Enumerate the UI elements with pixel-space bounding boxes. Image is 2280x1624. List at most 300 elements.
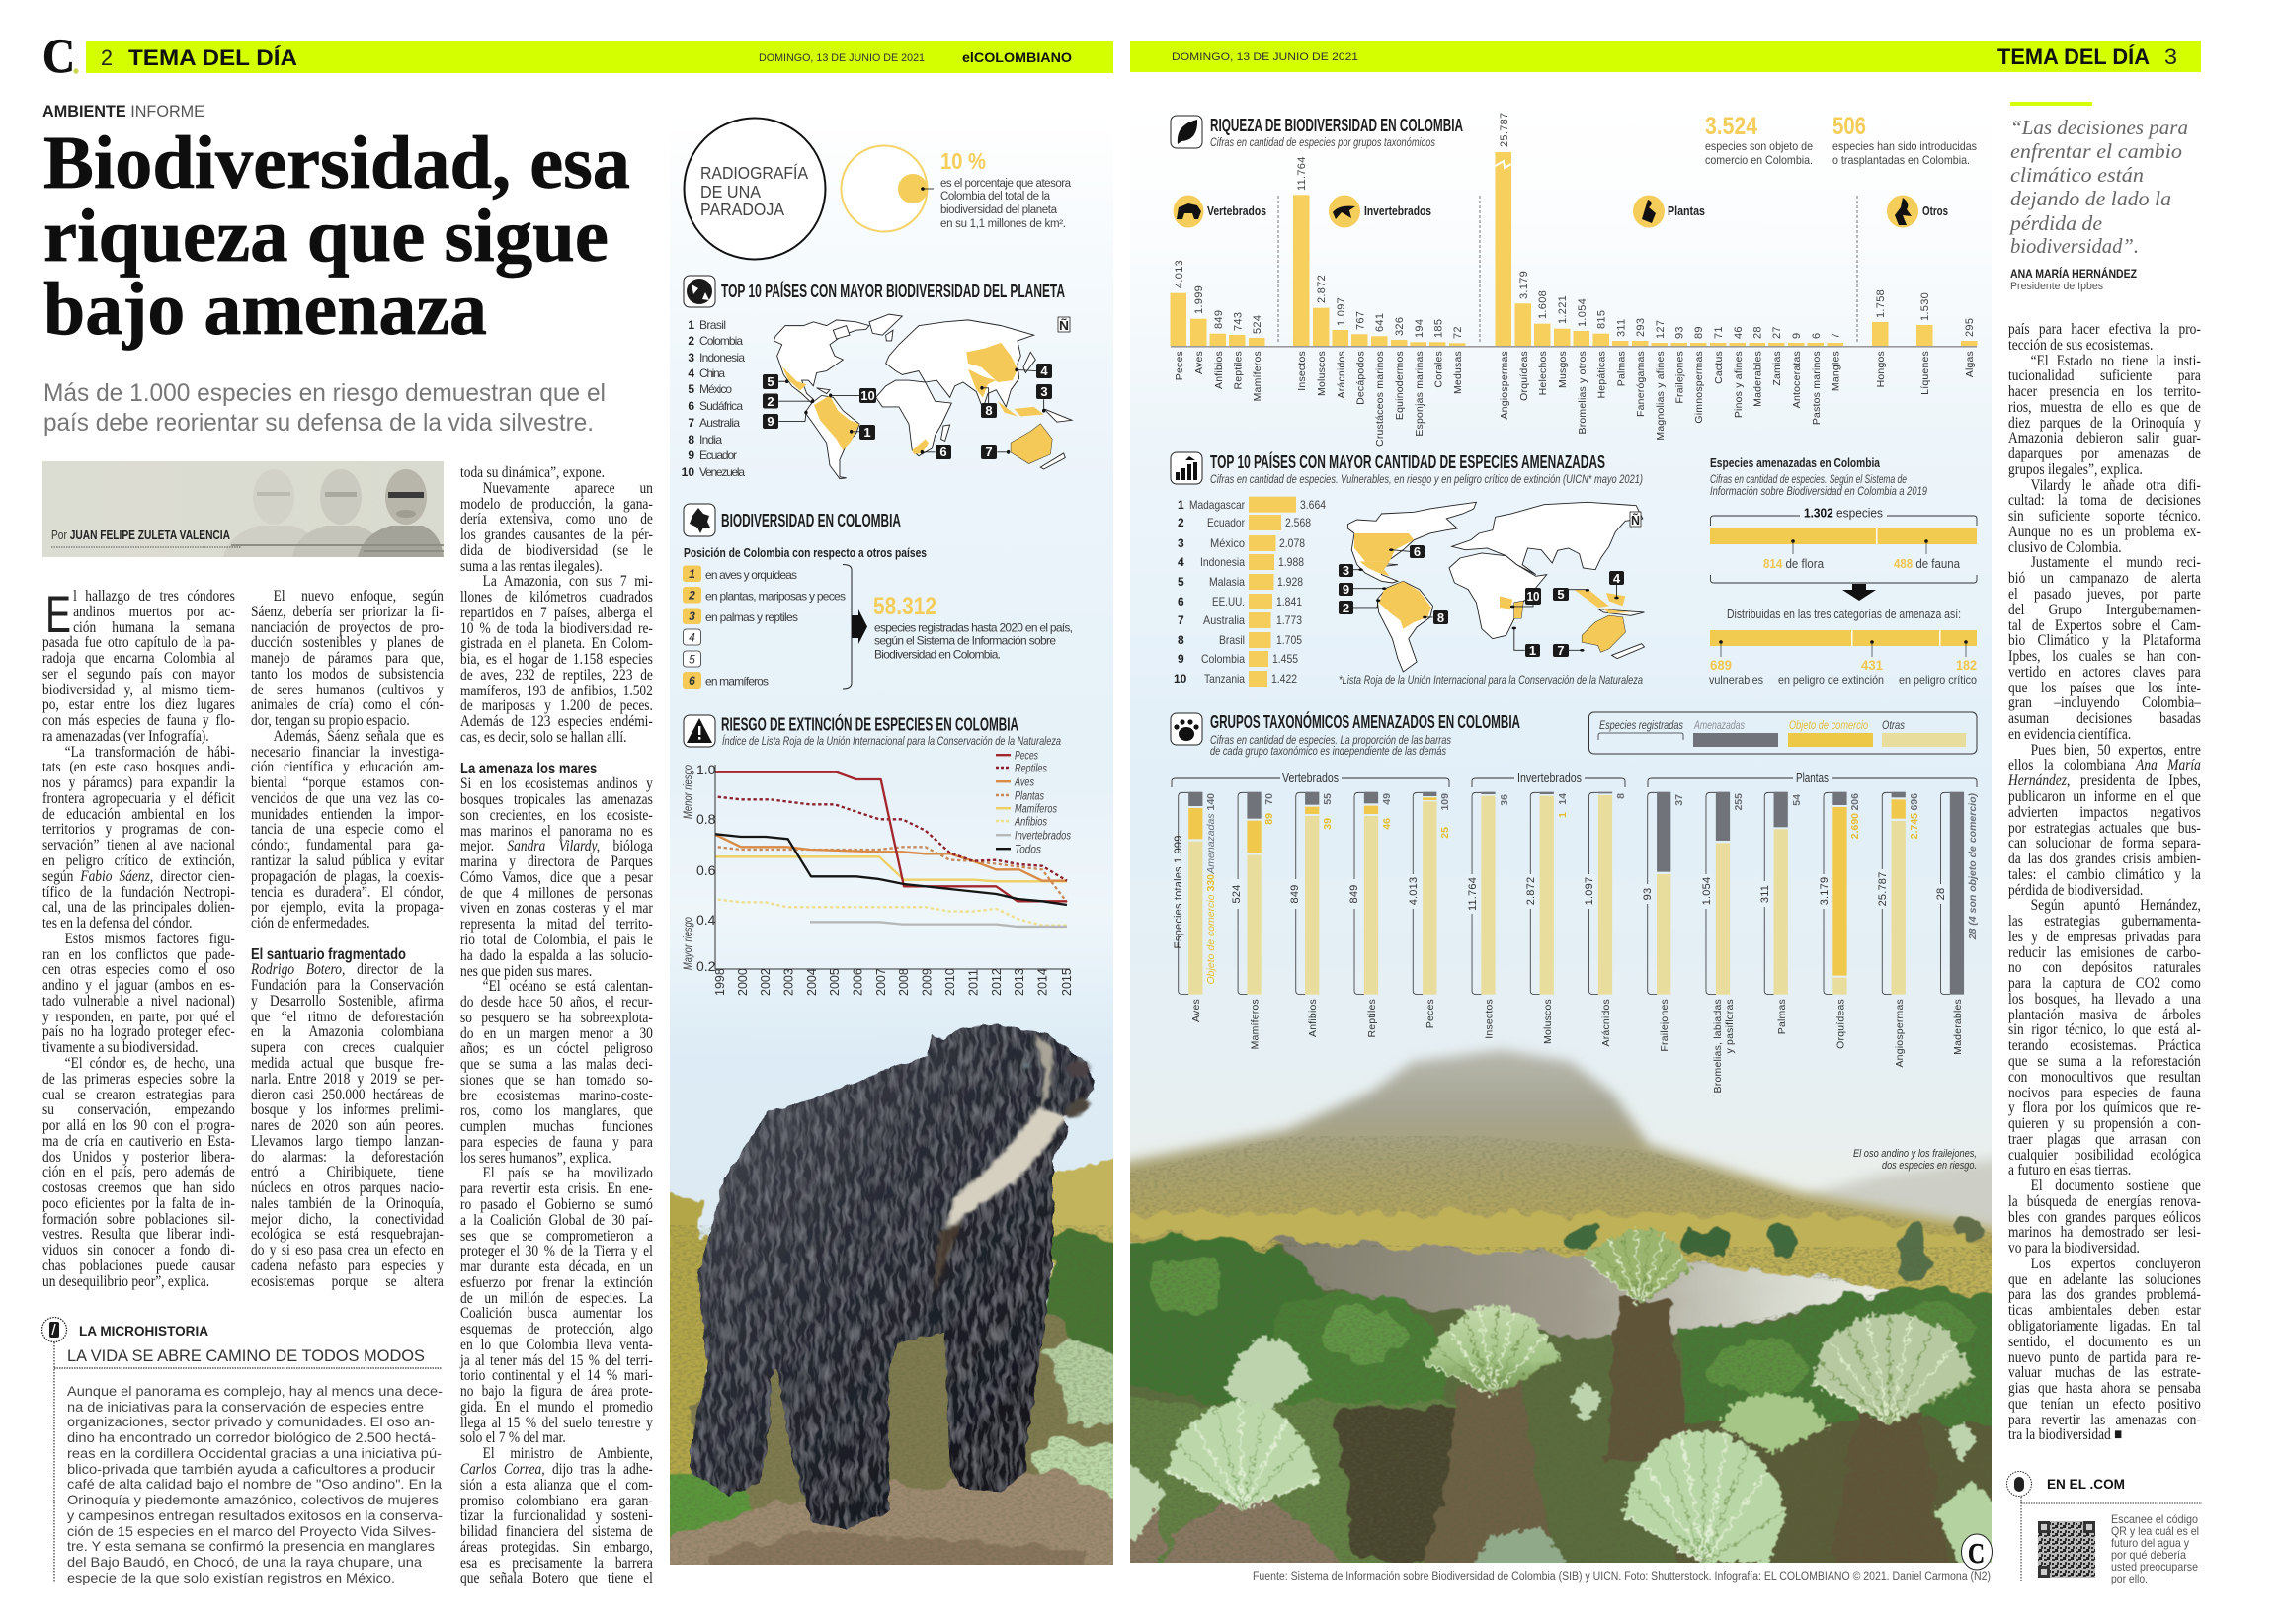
article column 4: plantación masiva de árboles xyxy=(2008,1007,2201,1023)
article column 2 xyxy=(251,588,444,1290)
threatened and commerce values: 206 xyxy=(1849,793,1861,811)
small crowns xyxy=(1225,1336,1312,1411)
circle title xyxy=(684,119,826,259)
scan text xyxy=(2111,1512,2199,1585)
bar values: 1.221 xyxy=(1557,295,1569,324)
totals: 25.787 xyxy=(1877,872,1889,906)
article column 4: vertido en actores claves para xyxy=(2008,664,2201,681)
article column 3: los seres humanos”, explica. xyxy=(460,1150,611,1167)
article column 4: da las dos grandes crisis ambien- xyxy=(2008,851,2201,867)
ranking list: 4 xyxy=(688,366,694,380)
heading: TOP 10 PAÍSES CON MAYOR BIODIVERSIDAD DEL PLANETA xyxy=(721,281,1065,301)
heading: BIODIVERSIDAD EN COLOMBIA xyxy=(721,511,901,530)
year labels: 2003 xyxy=(782,968,796,996)
subtitle: Índice de Lista Roja de la Unión Internacional para la Conservación de la Naturaleza xyxy=(722,735,1061,748)
article column 1: tado vulnerable a nivel nacional) xyxy=(42,993,235,1010)
threatened and commerce values xyxy=(1205,792,1979,984)
stat: introducidas: o trasplantadas en Colombia. xyxy=(1832,153,1970,167)
map number tags: 4 xyxy=(1613,571,1621,586)
threatened and commerce values: 89 xyxy=(1263,813,1275,825)
main headline: riqueza que sigue xyxy=(43,195,609,278)
ranking list: Indonesia xyxy=(699,351,745,365)
article column 4: Según apuntó Hernández, xyxy=(2031,897,2201,914)
categories bar: vulnerables xyxy=(1709,673,1763,687)
bar names: Mamíferos xyxy=(1252,351,1263,401)
y axis labels: 0.4 xyxy=(696,912,716,928)
bracket xyxy=(843,565,852,689)
article column 4: Aunque no es un problema ex- xyxy=(2008,524,2201,540)
page header: left xyxy=(42,28,1113,83)
pull quote: climático están xyxy=(2010,163,2144,187)
species text: especies registradas hasta 2020 en el país, xyxy=(874,620,1073,634)
threatened and commerce values: 255 xyxy=(1733,793,1745,811)
threatened and commerce values: 2.690 xyxy=(1849,813,1861,839)
bar values: 1.530 xyxy=(1919,292,1931,321)
photo: paramo landscape xyxy=(1130,1043,1992,1563)
article column 1 xyxy=(42,588,235,1290)
bar names: Decápodos xyxy=(1355,351,1367,405)
bar values: 1.097 xyxy=(1336,297,1347,326)
heading: TOP 10 PAÍSES CON MAYOR CANTIDAD DE ESPECIES AMENAZADAS xyxy=(1210,451,1605,472)
article column 2: en la Amazonia colombiana xyxy=(251,1023,444,1040)
article column 1: Estos mismos factores figu- xyxy=(65,931,235,947)
ranking list: Brasil xyxy=(699,318,726,332)
group names: Aves xyxy=(1190,999,1202,1022)
article column 1: cal, una de las principales dolien- xyxy=(42,899,235,916)
ranking list: 10 xyxy=(682,465,694,479)
bar names: Algas xyxy=(1964,351,1976,377)
article column 3: La amenaza los mares xyxy=(460,761,597,777)
article column 2: tanto los modos de subsistencia xyxy=(251,666,444,683)
bar values: 194 xyxy=(1414,319,1425,338)
article column 3: para revertir esta crisis. En ene- xyxy=(460,1180,653,1197)
article column 3: gistrada en el planeta. En Colom- xyxy=(460,635,653,652)
bar chart xyxy=(1170,113,1978,447)
article column 4: para revertir las amenazas con- xyxy=(2008,1412,2201,1428)
article column 4: publicaron un informe en el que xyxy=(2008,788,2201,805)
article column 1: “El cóndor es, de hecho, una xyxy=(65,1055,235,1072)
article column 4: nuevo punto de partida para re- xyxy=(2008,1349,2201,1366)
bar values: 9 xyxy=(1791,333,1803,339)
article column 3: marina y directora de Parques xyxy=(460,853,653,870)
article column 3: toda su dinámica”, expone. xyxy=(460,464,605,481)
bar names: Equinodermos xyxy=(1394,351,1406,420)
article column 1: ción humana la semana xyxy=(73,619,235,636)
article column 3: ses que se comprometieron a xyxy=(460,1228,653,1245)
country bars: Colombia xyxy=(1201,652,1245,666)
article column 4: les y de empresas privadas para xyxy=(2008,929,2201,945)
article column 3: de un millón de especies. La xyxy=(460,1290,653,1307)
totals xyxy=(1172,835,1947,949)
map number tags xyxy=(763,364,1052,459)
bar names: Anfibios xyxy=(1213,351,1225,389)
icon: leaf xyxy=(1171,116,1202,148)
micro body text: ción de 15 especies en el marco del Proyecto Vida Silves- xyxy=(67,1523,436,1539)
article column 3: de aves, 232 de reptiles, 223 de xyxy=(460,667,653,684)
article column 3: solo el 7 % del mar. xyxy=(460,1429,566,1446)
planet circle xyxy=(842,146,934,231)
ranking badges: en plantas, mariposas y peces xyxy=(705,589,846,603)
bear face xyxy=(1035,1033,1053,1106)
ranking list: 5 xyxy=(688,382,694,396)
legend: Anfibios xyxy=(1014,814,1047,828)
article column 2: por ejemplo, evita la propaga- xyxy=(251,899,444,916)
article column 3: a la Coalición Global de 30 paí- xyxy=(460,1212,653,1229)
bushes xyxy=(1106,1237,1334,1403)
article column 3: no bajo la figura de área prote- xyxy=(460,1383,653,1400)
pull quote: pérdida de xyxy=(2008,211,2102,235)
legend: Objeto de comercio xyxy=(1789,720,1868,732)
article column 4: nocivos para especies de fauna xyxy=(2008,1085,2201,1101)
country bars: 2.568 xyxy=(1285,516,1311,529)
country bars: 1.422 xyxy=(1271,672,1297,686)
ranking badges: 2 xyxy=(688,589,695,603)
article column 4: rios, muestra de ello es que de xyxy=(2008,399,2201,416)
article column 1: de educación ambiental en los xyxy=(42,806,235,823)
y axis labels: 0.2 xyxy=(696,958,716,974)
y axis labels: 0.8 xyxy=(696,811,716,827)
ranking badges xyxy=(683,565,846,689)
bar names: Medusas xyxy=(1452,351,1464,394)
main headline xyxy=(43,122,630,351)
bar values: 185 xyxy=(1432,319,1444,338)
bar values: 27 xyxy=(1771,326,1783,339)
pull quote: Presidente de Ipbes xyxy=(2010,281,2103,292)
article column 3: mas marinos el panorama no es xyxy=(460,823,653,840)
stat: introducidas xyxy=(1832,113,1977,167)
article column 1: un desequilibrio peor”, explica. xyxy=(42,1273,209,1290)
flora fauna bar: 814 de flora xyxy=(1763,557,1824,571)
categories bar: en peligro crítico xyxy=(1899,673,1977,687)
country bars: 3.664 xyxy=(1300,498,1326,512)
article column 4: a futuro en esas tierras. xyxy=(2008,1162,2131,1178)
bar names: Maderables xyxy=(1752,351,1764,407)
scan text: Escanee el código xyxy=(2111,1512,2198,1526)
article column 3: esfuerzo por frenar la extinción xyxy=(460,1274,653,1291)
date left: DOMINGO, 13 DE JUNIO DE 2021 xyxy=(759,52,925,64)
article column 1: cen otras especies como el oso xyxy=(42,961,235,978)
year labels: 2015 xyxy=(1060,968,1074,996)
threatened and commerce values: 70 xyxy=(1263,793,1275,805)
totals: 311 xyxy=(1759,885,1771,903)
bar names: Fanerógamas xyxy=(1635,351,1647,417)
article column 1: dos Unidos y posterior libera- xyxy=(42,1149,235,1166)
ranking list: 2 xyxy=(688,334,694,348)
article column 4: pérdida de biodiversidad. xyxy=(2008,882,2143,899)
year labels: 2008 xyxy=(897,968,911,996)
flora fauna bar xyxy=(1710,528,1977,571)
article column 3: de que 4 millones de personas xyxy=(460,885,653,902)
micro body text: Orinoquía y piedemonte amazónico, colectivos de mujeres xyxy=(67,1492,439,1507)
article column 2: ción de enfermedades. xyxy=(251,915,370,932)
ground base xyxy=(1130,1243,1893,1563)
article column 1: de las primeras especies sobre la xyxy=(42,1071,235,1088)
line chart: Mayor riesgo xyxy=(683,917,694,970)
article column 4: el pasado jueves, por parte xyxy=(2008,586,2201,603)
bar names: Reptiles xyxy=(1233,351,1245,390)
article column 1: su conservación, empezando xyxy=(42,1101,235,1118)
year labels: 2013 xyxy=(1013,968,1026,996)
article column 3: cas, es decir, solo se hallan allí. xyxy=(460,729,627,746)
article column 1: poco eficientes por la falta de in- xyxy=(42,1195,235,1212)
subtitle: Cifras en cantidad de especies. Vulnerables, en riesgo y en peligro crítico de extinción (UICN* mayo 2021) xyxy=(1210,474,1643,486)
article column 3: dería extensiva, como uno de xyxy=(460,511,653,528)
icon: pencil badge xyxy=(41,1318,67,1341)
article column 3: en lo que Colombia lleva venta- xyxy=(460,1337,653,1353)
bar names: Mangles xyxy=(1830,351,1841,391)
ranking list: México xyxy=(699,382,732,396)
frailejon stems xyxy=(1607,1299,1682,1462)
country bars: 1.773 xyxy=(1276,613,1302,627)
micro label: LA MICROHISTORIA xyxy=(79,1324,208,1339)
photo: spectacled bear xyxy=(652,1024,1126,1581)
article column 4: asuman decisiones basadas xyxy=(2008,710,2201,727)
country bars xyxy=(1174,497,1326,687)
heading: GRUPOS TAXONÓMICOS AMENAZADOS EN COLOMBIA xyxy=(1210,711,1520,732)
group names: Angiospermas xyxy=(1894,999,1906,1068)
article column 3: los grandes causantes de la pér- xyxy=(460,527,653,543)
article column 4: obligatoriamente ligadas. En tal xyxy=(2008,1318,2201,1335)
species text: Biodiversidad en Colombia. xyxy=(874,648,1001,662)
year labels: 2002 xyxy=(759,968,773,996)
article column 1: biodiversidad y, al mismo tiem- xyxy=(42,682,235,698)
QR code xyxy=(2038,1521,2095,1578)
article column 3: 10 % de toda la biodiversidad re- xyxy=(460,620,653,637)
world map xyxy=(774,314,1072,479)
article column 4: grupos ilegales”, explica. xyxy=(2008,461,2143,478)
article column 2: Además, Sáenz señala que es xyxy=(274,728,444,745)
article column 2: supera con creces cualquier xyxy=(251,1039,444,1056)
pull quote: “Las decisiones para xyxy=(2010,116,2188,139)
article column 4: bio Climático y la Plataforma xyxy=(2008,632,2201,649)
legend: Reptiles xyxy=(1015,761,1047,774)
article column 3: El ministro de Ambiente, xyxy=(483,1445,653,1462)
article column 3: que se suma a las malas deci- xyxy=(460,1056,653,1073)
bar values: 89 xyxy=(1693,326,1705,339)
stacked bars xyxy=(1179,792,1964,995)
article column 4: Ipbes, los cuales se han con- xyxy=(2008,648,2201,665)
article column 1: ra amenazadas (ver Infografía). xyxy=(42,728,209,745)
panel: grupos taxonomicos amenazados xyxy=(1171,711,1979,1093)
article column 4: clusivo de Colombia. xyxy=(2008,539,2122,556)
article column 3: esa es precisamente la barrera xyxy=(460,1555,653,1572)
ranking list xyxy=(682,318,745,479)
heading: RIQUEZA DE BIODIVERSIDAD EN COLOMBIA xyxy=(1210,116,1463,135)
percent text: es el porcentaje que atesora xyxy=(940,178,1072,190)
totals: 4.013 xyxy=(1408,877,1420,905)
article column 2: El santuario fragmentado xyxy=(251,946,406,963)
icon: globe xyxy=(684,276,715,307)
article column 1: por allá en los 90 con el progra- xyxy=(42,1117,235,1134)
quote attribution: ANA MARÍA HERNÁNDEZ xyxy=(2010,268,2137,281)
crown D xyxy=(1622,1429,1786,1563)
article column 3: do en un margen menor a 30 xyxy=(460,1025,653,1042)
group names: Palmas xyxy=(1776,999,1788,1034)
arrow xyxy=(1842,584,1876,601)
article column 3: Nuevamente aparece un xyxy=(483,480,653,497)
totals: 849 xyxy=(1289,885,1301,903)
map number tags: 8 xyxy=(985,403,993,418)
subheading: Posición de Colombia con respecto a otros países xyxy=(684,545,927,560)
line chart xyxy=(683,749,1074,996)
totals: 93 xyxy=(1642,888,1654,900)
threatened and commerce values: 25 xyxy=(1439,827,1451,839)
article column 2: ecosistemas porque se altera xyxy=(251,1273,444,1290)
article column 3: mejor. Sandra Vilardy, bióloga xyxy=(460,838,653,854)
article column 4: bles con grandes parques eólicos xyxy=(2008,1209,2201,1226)
threatened and commerce values: 46 xyxy=(1381,818,1393,830)
micro body text: y campesinos entregan resultados exitosos en la conserva- xyxy=(67,1507,443,1523)
ranking badges: 1 xyxy=(689,567,695,581)
article column 3: torio continental y el 14 % mari- xyxy=(460,1367,653,1384)
bar names: Helechos xyxy=(1537,351,1549,395)
subtitle: Cifras en cantidad de especies por grupos taxonómicos xyxy=(1210,137,1435,149)
panel: top 10 biodiversity xyxy=(682,276,1072,479)
article column 4: advierten impactos negativos xyxy=(2008,804,2201,821)
map number tags: 5 xyxy=(1557,587,1565,602)
species text: según el Sistema de Información sobre xyxy=(874,634,1056,648)
bar names: Gimnospermas xyxy=(1693,351,1705,424)
year labels: 2000 xyxy=(736,968,750,996)
micro body text: na de iniciativas para la conservación de especies entre xyxy=(67,1399,424,1415)
article column 1: radoja que encarna Colombia al xyxy=(42,650,235,667)
categories bar: 182 xyxy=(1956,657,1977,673)
photo texture xyxy=(670,1225,1113,1565)
scan text: futuro del agua y xyxy=(2111,1536,2189,1550)
year labels: 1998 xyxy=(713,968,727,996)
country bars: EE.UU. xyxy=(1212,595,1245,609)
threatened and commerce values: Amenazadas 140 xyxy=(1205,793,1217,875)
bar names: Líquenes xyxy=(1919,351,1931,395)
article column 4: sin rigor técnico, lo que está al- xyxy=(2008,1021,2201,1038)
group headers: Plantas xyxy=(1796,771,1829,785)
year labels: 2011 xyxy=(966,969,980,996)
drop cap: E xyxy=(45,586,71,644)
deck xyxy=(43,379,606,437)
article column 1: cual se crearon estrategias para xyxy=(42,1087,235,1102)
article column 4: Vilardy le añade otra difi- xyxy=(2031,477,2201,494)
circle title: PARADOJA xyxy=(700,200,784,219)
bar values: 4.013 xyxy=(1174,260,1185,288)
article column 3: ja al tener más del 15 % del terri- xyxy=(460,1352,653,1369)
panel: left infographic background xyxy=(670,99,1113,1565)
article column 2: vencidos de que una vez las co- xyxy=(251,790,444,807)
article column 2: propagación de plagas, la coexis- xyxy=(251,868,444,885)
bar names: Aves xyxy=(1193,351,1205,374)
group names: Mamíferos xyxy=(1249,999,1261,1049)
article column 3: repartidos en 7 países, alberga el xyxy=(460,605,653,621)
bar values: 641 xyxy=(1374,313,1386,332)
article column 4: la búsqueda de energías renova- xyxy=(2008,1193,2201,1210)
article column 1: en peligro crítico de extinción, xyxy=(42,853,235,869)
article column 1: territorios y programas de con- xyxy=(42,821,235,838)
bar names: Pastos marinos xyxy=(1811,351,1823,425)
flora fauna bar: 488 de fauna xyxy=(1894,557,1960,571)
article column 2: cóndor, fundamental para ga- xyxy=(251,837,444,853)
north mark: Ñ xyxy=(1631,513,1640,528)
date right: DOMINGO, 13 DE JUNIO DE 2021 xyxy=(1172,51,1358,63)
bar values: 1.054 xyxy=(1577,298,1588,327)
article column 4: valuar muchas de las estrate- xyxy=(2008,1364,2201,1381)
photo caption xyxy=(1853,1148,1977,1172)
percent text: biodiversidad del planeta xyxy=(940,204,1058,216)
bear body xyxy=(691,1024,1095,1529)
country bars: 1 xyxy=(1178,498,1184,512)
totals: 11.764 xyxy=(1467,877,1479,911)
group names: Peces xyxy=(1425,999,1436,1028)
article column 3: mar durante esta década, en un xyxy=(460,1259,653,1275)
threatened and commerce values: 8 xyxy=(1615,793,1627,799)
article column 2: dor, tengan su propio espacio. xyxy=(251,712,410,729)
article column 2: ción científica y educación am- xyxy=(251,759,444,775)
article column 2: entró a Chiribiquete, tiene xyxy=(251,1164,444,1180)
dry grass xyxy=(692,1314,1126,1511)
ranking badges: 5 xyxy=(689,652,695,666)
article column 2: necesario financiar la investiga- xyxy=(251,744,444,761)
article column 3: Además de 123 especies endémi- xyxy=(460,713,653,730)
article column 4: que en adelante las soluciones xyxy=(2008,1271,2201,1288)
article column 3: do desde hace 50 años, el recur- xyxy=(460,994,653,1011)
bar values: 1.758 xyxy=(1875,289,1887,318)
group names: Reptiles xyxy=(1366,999,1378,1038)
ranking list: 7 xyxy=(688,416,694,430)
article column 4: país para hacer efectiva la pro- xyxy=(2008,321,2201,338)
article column 4: daparques por amenazas de xyxy=(2008,446,2201,462)
article column 3: de mariposas y 1.200 de peces. xyxy=(460,697,653,714)
year labels: 2012 xyxy=(990,968,1004,996)
article column 3: bilidad financiera del sistema de xyxy=(460,1523,653,1540)
threatened and commerce values: 54 xyxy=(1791,794,1803,806)
article column 4: del Grupo Intergubernamen- xyxy=(2008,602,2201,618)
article column 1: tífico de la fundación Neotropi- xyxy=(42,884,235,901)
country bars: Ecuador xyxy=(1207,516,1245,529)
panel: especies amenazadas en Colombia: Información sobre Biodiversidad en Colombia a 2019 xyxy=(1710,486,1927,498)
micro body text: organizaciones, sector privado y comunidades. El oso an- xyxy=(67,1414,435,1429)
bar values: 28 xyxy=(1752,326,1764,339)
bar values xyxy=(1174,113,1976,339)
article column 3: bosques tropicales las amenazas xyxy=(460,791,653,808)
article column 4: las estrategias gubernamenta- xyxy=(2008,913,2201,930)
ranking badges: en aves y orquídeas xyxy=(705,568,797,582)
micro body text: Aunque el panorama es complejo, hay al menos una dece- xyxy=(67,1383,443,1399)
bar names: Peces xyxy=(1174,351,1185,380)
threatened and commerce values: 55 xyxy=(1322,793,1334,805)
header band right xyxy=(1130,41,2201,72)
article column 1: servación” tienen al ave nacional xyxy=(42,837,235,853)
ranking list: 1 xyxy=(688,318,694,332)
map number tags: 5 xyxy=(767,374,774,389)
bar names: Hepáticas xyxy=(1596,351,1608,399)
stat: comercio: especies son objeto de xyxy=(1705,139,1813,153)
leader lines xyxy=(1352,550,1616,650)
map number tags: 3 xyxy=(1040,384,1048,399)
threatened and commerce values: 1 xyxy=(1557,812,1569,818)
bear chest patch xyxy=(934,1033,1093,1294)
article column 4: Los expertos concluyeron xyxy=(2031,1256,2201,1272)
year labels: 2006 xyxy=(852,968,865,996)
article column 4: hacer presencia en los territo- xyxy=(2008,383,2201,400)
country bars: 9 xyxy=(1178,652,1184,666)
bar names: Esponjas marinas xyxy=(1414,351,1425,437)
article column 3: viven en zonas costeras y el mar xyxy=(460,900,653,917)
map number tags: 2 xyxy=(767,394,774,409)
threatened and commerce values: 49 xyxy=(1381,793,1393,805)
group names: y pasifloras xyxy=(1724,999,1736,1054)
ground texture xyxy=(1130,1241,1992,1563)
bar names: Cactus xyxy=(1713,351,1725,384)
group icons and labels: Plantas xyxy=(1668,203,1705,218)
green grass xyxy=(670,1472,753,1539)
